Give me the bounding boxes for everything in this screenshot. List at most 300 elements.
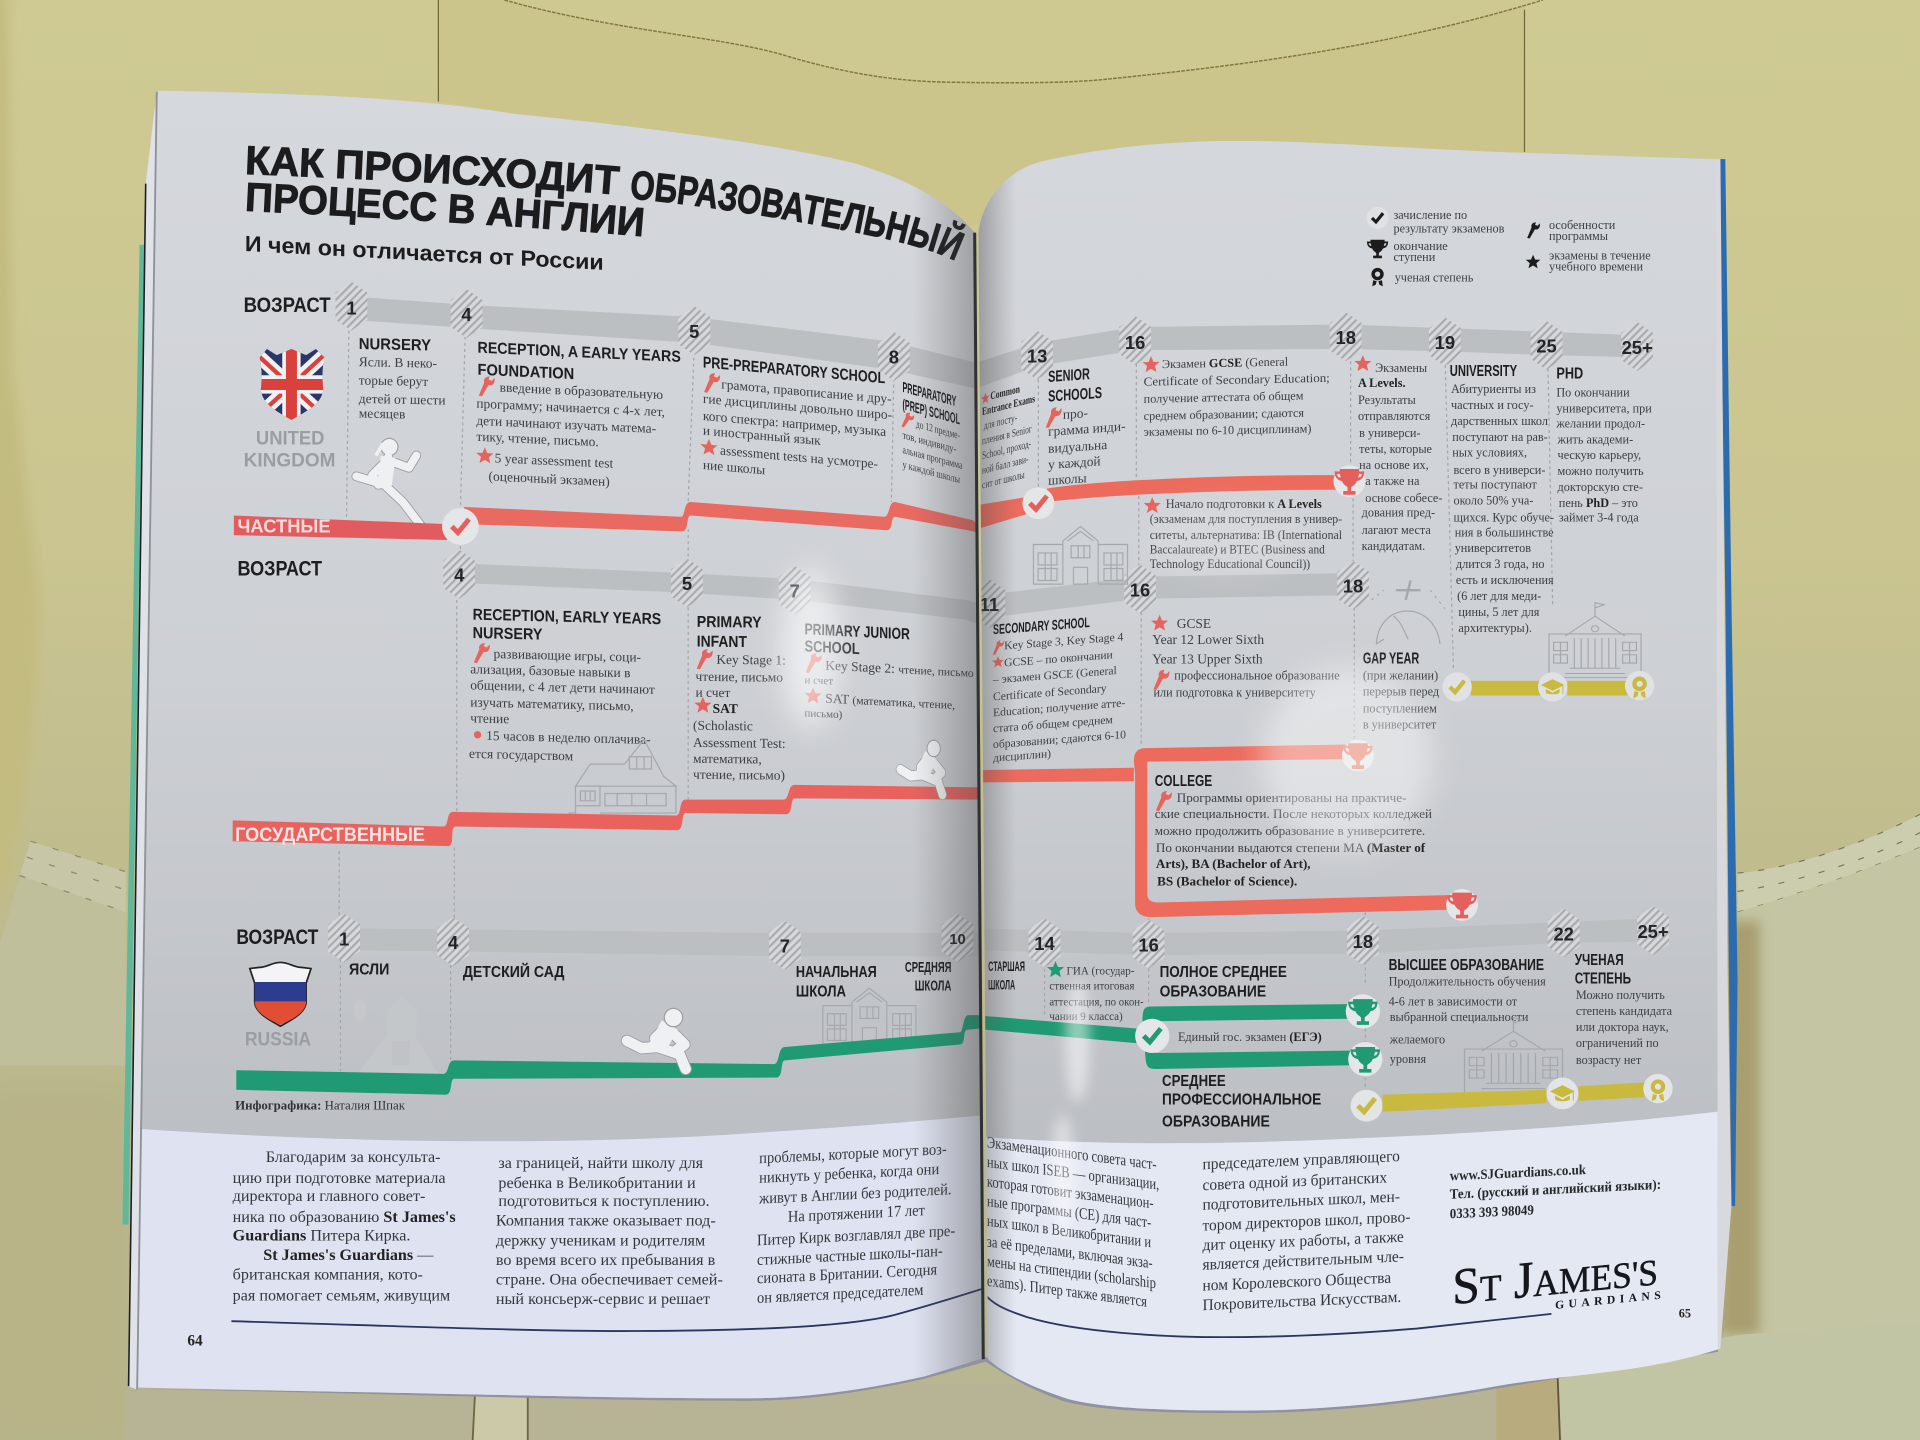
block: reception: RECEPTION, A EARLY YEARS	[478, 340, 681, 366]
block: university: архитектуры).	[1458, 621, 1532, 635]
block: higher education: выбранной специальности	[1390, 1010, 1529, 1024]
block: common entrance: School, проход-	[982, 439, 1031, 463]
block: primary infant: чтение, письмо)	[693, 767, 785, 783]
text column 3	[757, 1140, 955, 1307]
block: PhD: По окончании	[1556, 386, 1630, 400]
block: senior schools: грамма инди-	[1048, 419, 1126, 439]
block: common entrance: ной балл зави-	[982, 453, 1029, 477]
block: secondary school: Certificate of Secondary	[993, 682, 1107, 703]
block: college: можно продолжить образование в университете.	[1155, 823, 1425, 838]
Russian headings right: ОБРАЗОВАНИЕ	[1162, 1114, 1270, 1131]
block: primary junior: PRIMARY JUNIOR	[804, 621, 910, 643]
text column 5: является действительным чле-	[1202, 1248, 1404, 1274]
block: GCSE state: или подготовка к университету	[1153, 686, 1317, 700]
icon: check	[1351, 1090, 1382, 1122]
spine line	[975, 233, 983, 1359]
block: preparatory: до 12 предме-	[916, 418, 960, 442]
block: degree: Можно получить	[1576, 988, 1665, 1002]
age bands left	[343, 296, 980, 956]
block: nursery: NURSERY	[359, 336, 431, 355]
block: GIA: ственная итоговая	[1049, 980, 1134, 992]
yellow path: Russia	[1382, 1082, 1644, 1112]
block: primary junior: SAT (математика, чтение,	[825, 691, 955, 712]
age markers left: 7	[790, 581, 800, 602]
text column 3: сионата в Британии. Сегодня	[757, 1261, 937, 1288]
block: GCSE exam: экзамены по 6-10 дисциплинам)	[1144, 421, 1311, 439]
age markers left: 4	[461, 304, 472, 325]
age markers right: 18	[1353, 931, 1373, 952]
block: college: BS (Bachelor of Science).	[1157, 873, 1297, 888]
UK label: UNITED	[256, 427, 324, 449]
block: secondary school: Education; получение атте-	[993, 696, 1125, 719]
Russian stage headings: ДЕТСКИЙ САД	[463, 962, 565, 981]
block: nursery	[359, 336, 446, 422]
block: reception: (оценочный экзамен)	[489, 469, 610, 489]
block: degree: возрасту нет	[1576, 1053, 1642, 1067]
dashed age guides right	[1038, 349, 1553, 1090]
age markers right: 16	[1138, 934, 1159, 955]
block: common entrance: пления в Senior	[982, 424, 1032, 448]
text column 5: подготовительных школ, мен-	[1202, 1188, 1400, 1214]
block: A levels: отправляются	[1358, 409, 1431, 423]
block: pre-preparatory: assessment tests на усмотре-	[720, 443, 878, 471]
block: GCSE state: GCSE	[1177, 616, 1211, 631]
block: primary infant: PRIMARY	[697, 614, 762, 632]
age markers right: 13	[1027, 345, 1047, 366]
block: primary junior: письмо)	[804, 707, 843, 721]
block: reception: программу; начинается с 4-х лет,	[476, 396, 665, 419]
block: higher education	[1389, 957, 1546, 1066]
block: reception state: изучать математику, письмо,	[470, 694, 634, 713]
block: university: ния в большинстве	[1455, 525, 1554, 539]
block: degree: УЧЕНАЯ	[1575, 952, 1624, 969]
block: college: По окончании выдаются степени MA (Master of	[1156, 840, 1426, 855]
red path: state schools	[233, 785, 980, 846]
block: A levels prep: Technology Educational Council))	[1150, 557, 1310, 571]
age markers right: 18	[1336, 327, 1356, 348]
block: senior schools: SENIOR	[1048, 366, 1090, 386]
magazine edges	[122, 159, 1738, 1413]
glare left	[781, 568, 840, 730]
text column 2: за границей, найти школу для	[498, 1155, 704, 1172]
green path: Russia right	[973, 1004, 1351, 1069]
block: secondary school: GCSE – по окончании	[1004, 648, 1113, 670]
block: college: ские специальности. После некоторых колледжей	[1155, 806, 1432, 821]
block: gap year: перерыв перед	[1363, 685, 1439, 699]
block: PhD: можно получить	[1558, 464, 1644, 478]
block: higher education: уровня	[1390, 1052, 1426, 1066]
UK label: KINGDOM	[244, 450, 336, 472]
text column 5	[1202, 1147, 1410, 1314]
spine shadow right	[973, 122, 1022, 1420]
block: university: длится 3 года, но	[1456, 557, 1545, 571]
text column 2: стране. Она обеспечивает семей-	[496, 1271, 723, 1288]
Russian headings right: ОБРАЗОВАНИЕ	[1160, 984, 1266, 1001]
age markers left: 4	[454, 565, 465, 586]
block: nursery: детей от шести	[359, 391, 446, 408]
age markers left	[328, 282, 973, 970]
block: higher education: ВЫСШЕЕ ОБРАЗОВАНИЕ	[1389, 957, 1544, 974]
block: university: цины, 5 лет для	[1458, 605, 1540, 619]
block: university: щихся. Курс обуче-	[1453, 511, 1554, 525]
block: primary infant: чтение, письмо	[696, 669, 783, 685]
legend: экзамены в течение	[1549, 249, 1651, 263]
text column 4: ных школ ISEB — организации,	[987, 1154, 1159, 1194]
dashed age guides left	[339, 324, 894, 1071]
text column 5: ном Королевского Общества	[1202, 1269, 1391, 1295]
text column 3: он является председателем	[757, 1281, 924, 1307]
block: university: частных и госу-	[1451, 398, 1534, 412]
age markers right: 18	[1343, 576, 1363, 597]
block: reception: 5 year assessment test	[495, 450, 613, 471]
block: primary infant: SAT	[713, 701, 738, 716]
text column 5: дит оценку их работы, а также	[1202, 1229, 1404, 1254]
text column 1: рая помогает семьям, живущим	[233, 1287, 450, 1304]
block: PhD: желании продол-	[1555, 416, 1645, 430]
block: primary infant: INFANT	[697, 634, 747, 651]
block: GCSE exam: среднем образовании; сдаются	[1144, 406, 1304, 423]
text column 4: exams). Питер также является	[987, 1272, 1147, 1311]
block: GCSE state	[1151, 615, 1340, 700]
block: college: COLLEGE	[1155, 773, 1212, 790]
block: A levels prep: Baccalaureate) и BTEC (Business and	[1150, 542, 1325, 556]
block: senior schools: SCHOOLS	[1048, 385, 1102, 406]
block: pre-preparatory: PRE-PREPARATORY SCHOOL	[703, 354, 886, 387]
legend	[1367, 207, 1651, 286]
text column 1: ника по образованию St James's	[233, 1209, 456, 1226]
block: primary junior: SCHOOL	[804, 638, 860, 658]
block: secondary school	[992, 611, 1126, 765]
block: A levels: Результаты	[1358, 393, 1416, 407]
block: preparatory	[901, 379, 962, 487]
block: university	[1450, 363, 1554, 635]
Russian stage headings: НАЧАЛЬНАЯ	[796, 964, 877, 981]
block: PhD: ческую карьеру,	[1558, 448, 1641, 462]
block: A levels: A Levels.	[1358, 376, 1406, 390]
text column 1: St James's Guardians —	[263, 1247, 434, 1264]
icon: senior school building	[1033, 527, 1128, 584]
block: pre-preparatory: грамота, правописание и дру-	[721, 377, 892, 406]
text column 1: британская компания, кото-	[233, 1267, 423, 1284]
text column 3: живут в Англии без родителей.	[758, 1181, 952, 1208]
age markers right: 19	[1435, 332, 1455, 353]
block: preparatory: (PREP) SCHOOL	[902, 396, 960, 428]
block: higher education: желаемого	[1389, 1032, 1445, 1046]
Russian headings right: СТАРШАЯ	[988, 959, 1025, 974]
Russian headings right: ШКОЛА	[988, 977, 1015, 992]
age labels left	[236, 294, 331, 949]
block: college	[1155, 773, 1432, 888]
block: PhD: докторскую сте-	[1558, 480, 1643, 494]
block: nursery: Ясли. В неко-	[359, 354, 437, 371]
icon: Russia shield	[250, 962, 311, 1026]
block: A levels: теты, которые	[1359, 442, 1432, 456]
block: common entrance	[981, 380, 1035, 492]
block: university: ных условиях,	[1452, 446, 1527, 460]
icon: trophy	[1346, 994, 1380, 1029]
block: common entrance: сит от школы	[982, 470, 1025, 492]
red path: state right with college branch	[973, 744, 1449, 917]
block: GIA: ГИА (государ-	[1067, 966, 1135, 978]
age markers left: 4	[448, 932, 459, 953]
contacts: www.SJGuardians.co.uk	[1450, 1161, 1586, 1184]
block: preparatory: тов, индивиду-	[902, 430, 957, 456]
age markers left: 7	[780, 936, 790, 957]
block: reception	[476, 340, 681, 492]
block: secondary school: дисциплин)	[993, 747, 1051, 765]
block: college: Программы ориентированы на практиче-	[1177, 790, 1406, 805]
age markers right: 22	[1553, 923, 1574, 944]
block: PhD: займет 3-4 года	[1559, 511, 1639, 525]
page number 64: 64	[187, 1333, 203, 1350]
text column 1: Благодарим за консульта-	[266, 1149, 441, 1166]
age markers right	[973, 312, 1669, 969]
block: university: есть и исключения	[1456, 573, 1554, 587]
block: A levels: основе собесе-	[1365, 491, 1442, 505]
block: PhD	[1555, 365, 1652, 525]
block: senior schools: видуальна	[1048, 437, 1107, 456]
text column 2: ребенка в Великобритании и	[498, 1175, 696, 1192]
block: GCSE exam: Certificate of Secondary Education;	[1144, 371, 1330, 389]
text column 4: Экзаменационного совета част-	[987, 1134, 1157, 1174]
text column 4: ные программы (CE) для част-	[987, 1193, 1151, 1232]
logo: GUARDIANS	[1555, 1288, 1665, 1312]
red path: private schools	[464, 502, 980, 534]
icon: school building	[823, 988, 916, 1044]
block: primary infant	[693, 614, 786, 783]
block: A levels: лагают места	[1362, 523, 1431, 537]
yellow path: UK	[1471, 681, 1627, 696]
Russian stage headings: СРЕДНЯЯ	[905, 960, 951, 976]
block: primary junior: и счет	[804, 674, 833, 688]
block: primary infant: математика,	[693, 751, 762, 767]
block: GCSE state: Year 12 Lower Sixth	[1152, 632, 1264, 647]
block: secondary school: образовании; сдаются 6-10	[993, 728, 1126, 751]
contacts: 0333 393 98049	[1450, 1202, 1534, 1221]
block: preparatory: PREPARATORY	[902, 379, 956, 410]
block: senior schools	[1046, 364, 1126, 488]
block: reception state: RECEPTION, EARLY YEARS	[473, 607, 661, 628]
block: GIA	[1047, 961, 1144, 1023]
Russian headings right: ПРОФЕССИОНАЛЬНОЕ	[1162, 1091, 1321, 1108]
icon: medal	[1625, 671, 1654, 700]
text column 5: тором директоров школ, прово-	[1202, 1209, 1410, 1235]
block: GCSE state: Year 13 Upper Sixth	[1152, 652, 1263, 667]
block: reception: дети начинают изучать матема-	[476, 413, 656, 436]
block: A levels: а также на	[1365, 474, 1420, 488]
left page	[130, 90, 982, 1398]
block: A levels: Экзамены	[1375, 361, 1427, 375]
text column 2: Компания также оказывает под-	[496, 1213, 716, 1230]
Russian stage headings: ШКОЛА	[796, 984, 847, 1001]
label: state: ГОСУДАРСТВЕННЫЕ	[235, 825, 425, 846]
block: university: дарственных школ	[1451, 414, 1548, 428]
block: senior schools: у каждой	[1048, 453, 1101, 472]
block: university: (6 лет для меди-	[1457, 589, 1541, 603]
age labels left: ВОЗРАСТ	[244, 294, 331, 317]
block: reception: тику, чтение, письмо.	[476, 429, 599, 449]
age markers right: 11	[980, 594, 999, 615]
block: university: Абитуриенты из	[1451, 382, 1536, 396]
block: pre-preparatory: и иностранный язык	[703, 423, 821, 448]
block: GIA: аттестация, по окон-	[1049, 996, 1144, 1008]
text column 2: держку ученикам и родителям	[496, 1232, 705, 1249]
text column 4: за её пределами, включая экза-	[987, 1233, 1153, 1273]
legend: программы	[1549, 229, 1608, 243]
left page stack edge	[129, 92, 157, 1390]
block: pre-preparatory: кого спектра: например, музыка	[703, 408, 886, 439]
block: primary junior: Key Stage 2: чтение, письмо	[825, 658, 974, 680]
text column 3: Питер Кирк возглавлял две пре-	[757, 1222, 955, 1250]
text column 2	[496, 1155, 723, 1308]
legend: ученая степень	[1395, 271, 1474, 285]
block: PhD: пень PhD – это	[1559, 496, 1638, 510]
block: A levels	[1354, 355, 1442, 553]
age labels left: ВОЗРАСТ	[238, 558, 322, 581]
title: КАК ПРОИСХОДИТ	[246, 146, 620, 199]
text column 4: ных школ в Великобритании и	[987, 1212, 1151, 1252]
icon: university building	[1464, 1018, 1562, 1093]
block: university: университетов	[1455, 541, 1531, 555]
block: gap year: GAP YEAR	[1363, 651, 1420, 668]
title: ОБРАЗОВАТЕЛЬНЫЙ	[631, 170, 966, 260]
block: higher education: Продолжительность обучения	[1389, 975, 1546, 989]
block: degree: ограничений по	[1576, 1036, 1659, 1050]
block: reception state	[469, 607, 661, 766]
text column 3: стижные частные школы-пан-	[757, 1242, 943, 1269]
credit: Инфографика: Наталия Шпак	[235, 1098, 406, 1112]
age markers left: 8	[889, 347, 899, 368]
block: pre-preparatory: ние школы	[703, 457, 765, 477]
icon: graduate cap	[1538, 672, 1567, 702]
block: pre-preparatory	[700, 356, 892, 474]
text column 1: цию при подготовке материала	[233, 1170, 446, 1187]
text column 4: мены на стипендии (scholarship	[987, 1253, 1156, 1293]
block: reception state: 15 часов в неделю оплачива-	[486, 728, 651, 747]
text column 1: директора и главного совет-	[233, 1188, 425, 1205]
Russian stage headings: ШКОЛА	[915, 979, 952, 995]
icon: check circle	[1135, 1019, 1169, 1053]
icon: runner man	[627, 1008, 686, 1069]
block: A levels: кандидатам.	[1362, 539, 1425, 553]
block: gap year: (при желании)	[1363, 669, 1438, 683]
age markers left: 1	[339, 928, 349, 949]
block: gap year: поступлением	[1363, 702, 1437, 716]
text column 5: председателем управляющего	[1202, 1148, 1400, 1173]
Russian headings right: СРЕДНЕЕ	[1162, 1073, 1226, 1090]
block: pre-preparatory: гие дисциплины довольно широ-	[703, 391, 892, 422]
title	[246, 146, 966, 270]
legend: особенности	[1549, 218, 1616, 232]
logo: ST JAMES'S	[1452, 1239, 1658, 1316]
age bands right	[973, 324, 1653, 955]
text column 2: во время всего их пребывания в	[496, 1252, 716, 1269]
block: common entrance: Common	[990, 384, 1020, 403]
age markers right: 25+	[1622, 337, 1653, 358]
block: degree: степень кандидата	[1576, 1004, 1673, 1018]
block: A levels prep	[1144, 497, 1343, 571]
block: secondary school: стата об общем среднем	[993, 713, 1113, 735]
block: reception state: ется государством	[469, 746, 574, 763]
green path: Russia	[236, 1015, 980, 1095]
block: university: всего в универси-	[1453, 463, 1545, 477]
legend: учебного времени	[1549, 260, 1644, 274]
block: PhD: университета, при	[1556, 402, 1652, 416]
block: primary infant: и счет	[696, 685, 731, 700]
block: senior schools: школы	[1048, 470, 1087, 488]
block: college: Arts), BA (Bachelor of Art),	[1156, 856, 1311, 871]
age labels left: ВОЗРАСТ	[236, 926, 319, 949]
block: reception state: NURSERY	[473, 625, 543, 644]
block: GCSE exam	[1142, 352, 1330, 439]
age markers left: 5	[682, 573, 692, 594]
age markers right: 25	[1536, 336, 1557, 357]
title: И чем он отличается от России	[245, 231, 604, 275]
text column 2: подготовиться к поступлению.	[498, 1193, 710, 1210]
block: nursery: месяцев	[359, 406, 405, 422]
age markers right: 25+	[1637, 921, 1669, 942]
block: GCSE state: профессиональное образование	[1174, 669, 1340, 683]
icon: runner girl	[356, 438, 422, 528]
icon: playground	[354, 996, 438, 1074]
icon: medal	[1643, 1074, 1673, 1103]
text column 3: проблемы, которые могут воз-	[759, 1140, 947, 1167]
block: gap year	[1363, 651, 1439, 732]
block: primary infant: Assessment Test:	[693, 735, 786, 751]
Russia label: RUSSIA	[245, 1029, 311, 1051]
block: secondary school: Key Stage 3, Key Stage 4	[1004, 630, 1124, 652]
block: A levels: на основе их,	[1359, 458, 1429, 472]
block: gap year: в университет	[1363, 718, 1437, 732]
block: reception: введение в образовательную	[500, 380, 663, 402]
block: A levels prep: (экзаменам для поступления в универ-	[1150, 512, 1342, 526]
icon: trophy	[1446, 889, 1478, 921]
icon: trophy	[1342, 740, 1374, 771]
right page	[973, 122, 1733, 1420]
icon: university building	[1549, 603, 1641, 678]
block: degree	[1575, 952, 1673, 1067]
block: university: теты поступают	[1453, 478, 1538, 492]
block: A levels: дования пред-	[1362, 506, 1435, 520]
icon: globe and plane	[1371, 580, 1445, 644]
Russian stage headings: ЯСЛИ	[349, 962, 389, 979]
age markers left: 1	[346, 298, 357, 319]
text column 3: На протяжении 17 лет	[788, 1201, 925, 1226]
label: private: ЧАСТНЫЕ	[238, 516, 331, 537]
block: higher education: 4-6 лет в зависимости от	[1389, 994, 1518, 1008]
age markers left: 5	[689, 321, 699, 342]
block: university: около 50% уча-	[1453, 493, 1533, 507]
contacts: Тел. (русский и английский языки):	[1450, 1176, 1661, 1203]
text column 5: Покровительства Искусствам.	[1202, 1289, 1401, 1314]
legend: зачисление по	[1393, 208, 1467, 222]
block: university: поступают на рав-	[1452, 430, 1548, 444]
block: A levels prep: Начало подготовки к A Levels	[1166, 497, 1322, 511]
text column 3: никнуть у ребенка, когда они	[759, 1160, 939, 1187]
rule right	[987, 1297, 1551, 1337]
icon: check circle	[1022, 487, 1054, 519]
block: reception state: чтение	[470, 710, 509, 726]
block: PhD: PHD	[1556, 365, 1583, 382]
page number 65: 65	[1679, 1307, 1691, 1321]
rule left	[231, 1288, 984, 1331]
text column 1	[233, 1149, 456, 1304]
title: ПРОЦЕСС В АНГЛИИ	[246, 182, 644, 237]
block: PhD: жить академи-	[1557, 432, 1633, 446]
icon: UK shield	[260, 349, 324, 420]
block: reception state: общении, с 4 лет дети начинают	[470, 677, 655, 697]
contacts	[1450, 1158, 1661, 1221]
